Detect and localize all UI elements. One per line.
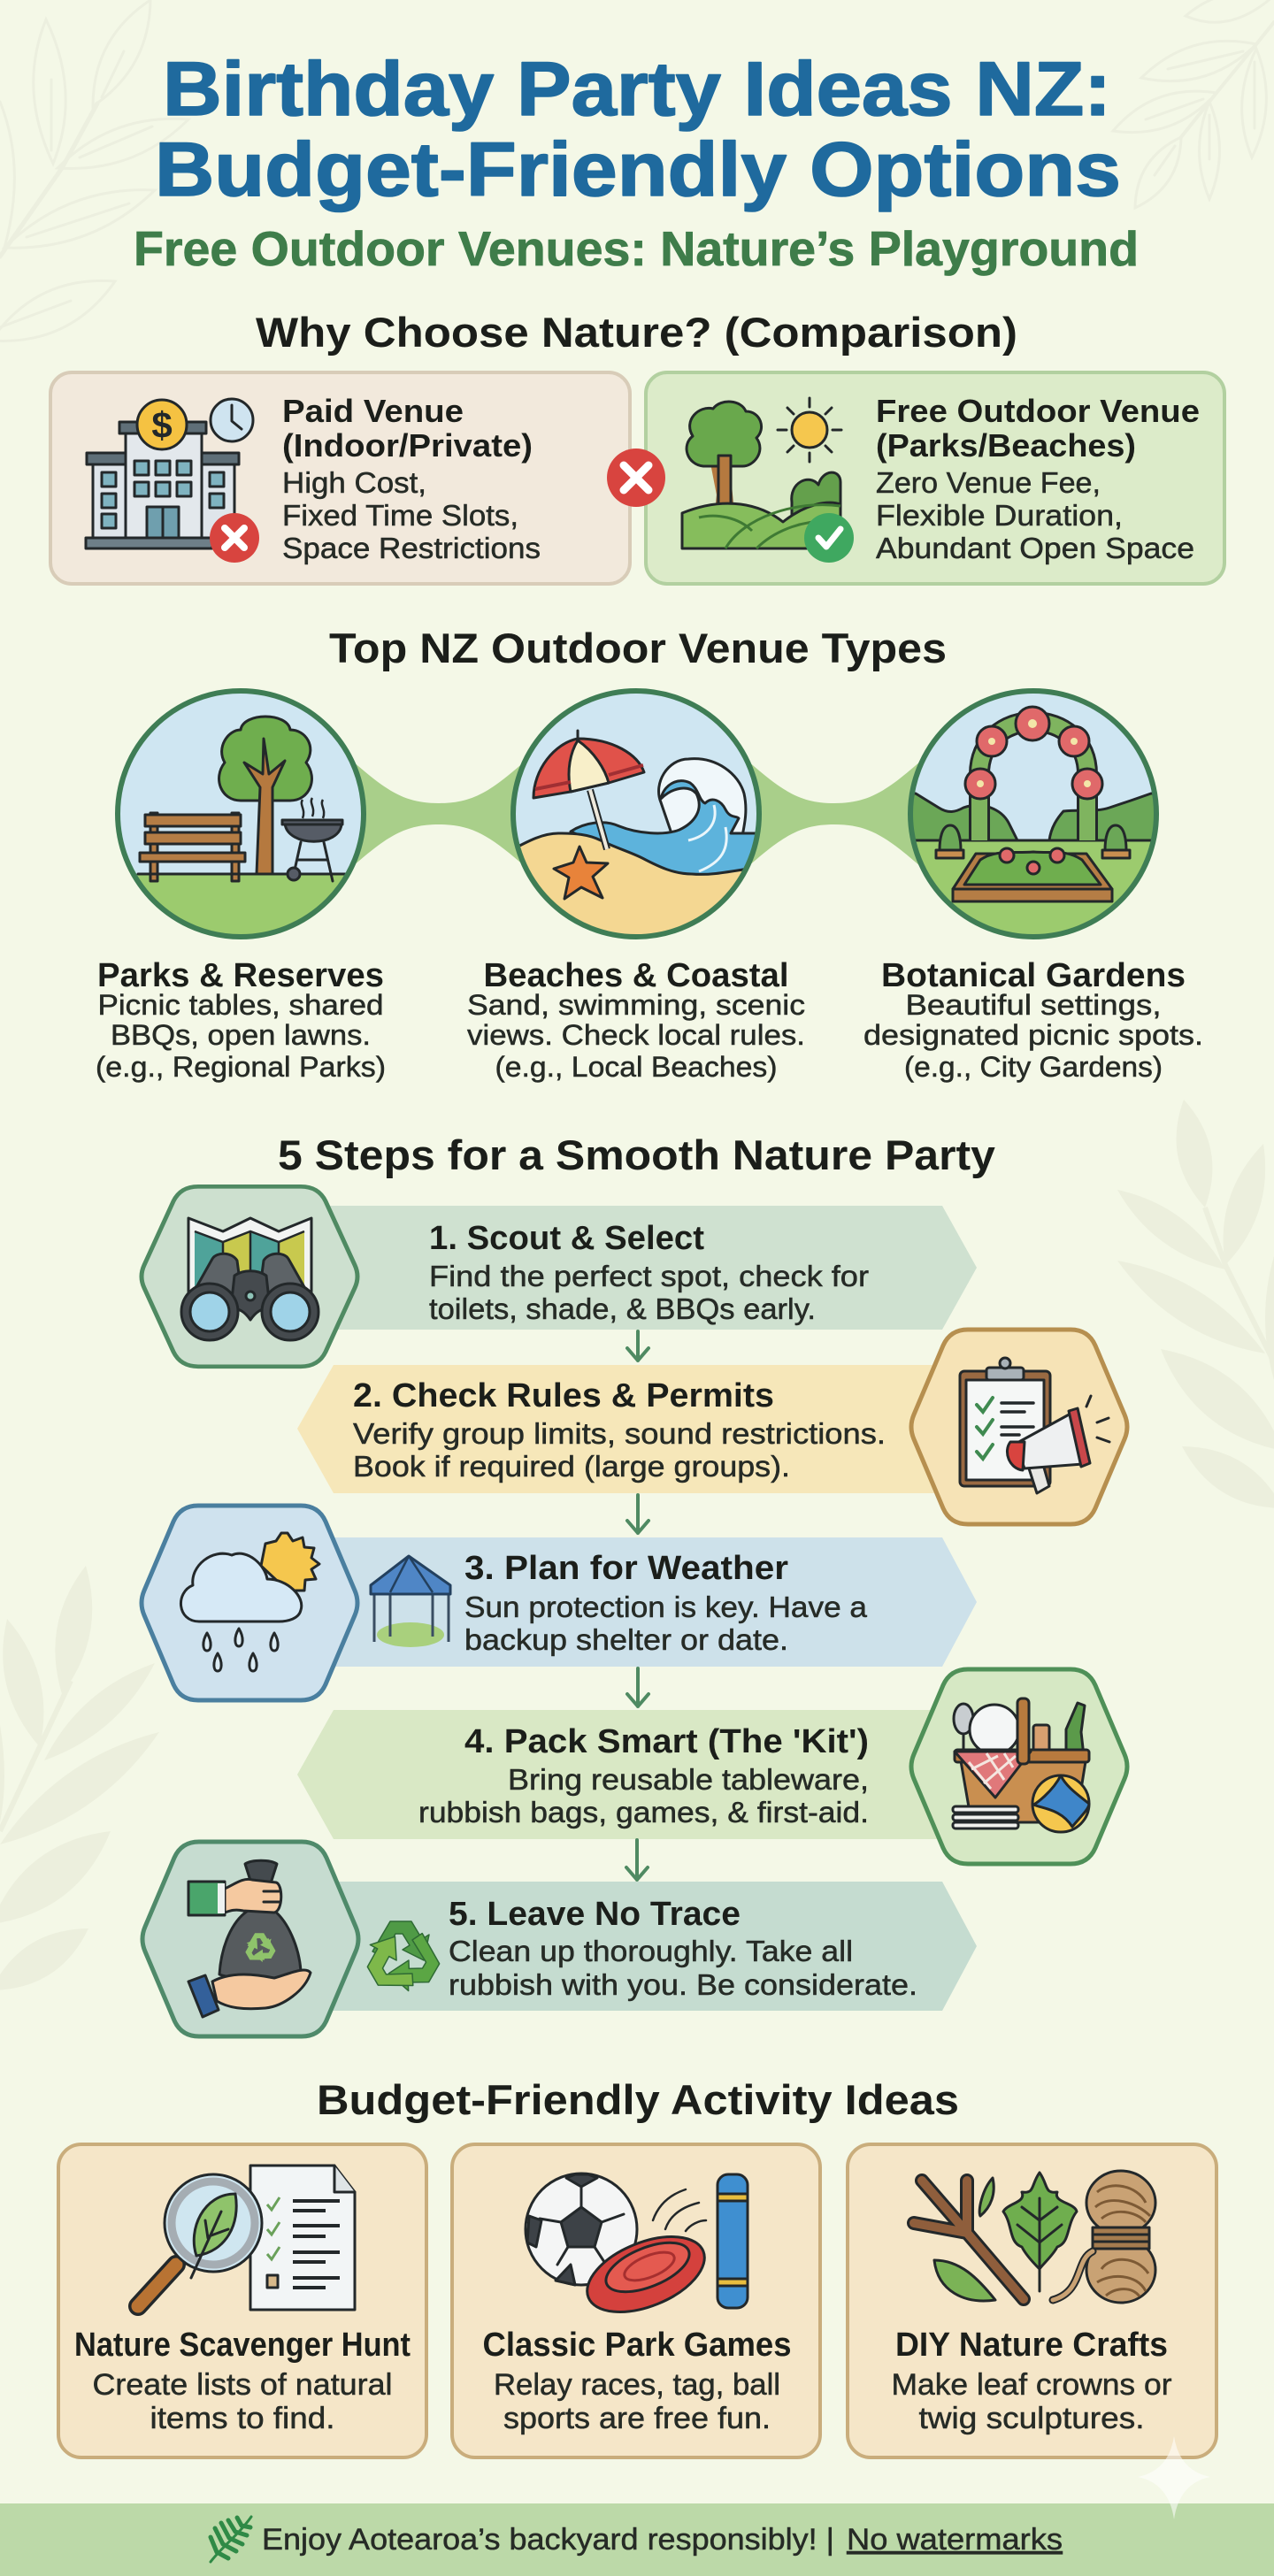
step 3 text <box>464 1550 868 1656</box>
sparkle mark <box>1138 2436 1210 2519</box>
arrow: step 1 to 2 <box>627 1331 649 1361</box>
venue text: botanical gardens <box>863 957 1203 1083</box>
footer text: Enjoy Aotearoa’s backyard responsibly! | <box>262 2523 834 2557</box>
footer bar <box>0 2503 1274 2576</box>
scavenger hunt text: items to find. <box>150 2402 334 2435</box>
card: park games <box>452 2144 820 2457</box>
venue text: beaches: Beaches & Coastal <box>483 957 789 994</box>
free outdoor venue text: Zero Venue Fee, <box>876 466 1101 499</box>
icon: paid venue building <box>86 399 259 563</box>
venue text: beaches: views. Check local rules. <box>467 1019 805 1051</box>
park games text: sports are free fun. <box>503 2402 771 2435</box>
step 1 text: 1. Scout & Select <box>429 1220 704 1257</box>
title: Budget-Friendly Options <box>155 127 1121 212</box>
free outdoor venue text: Abundant Open Space <box>876 532 1194 564</box>
step 3 text: Sun protection is key. Have a <box>464 1591 868 1623</box>
step 2 text: 2. Check Rules & Permits <box>353 1377 774 1414</box>
icon: beach circle <box>504 691 770 947</box>
icon: recycle symbol <box>358 1921 449 2000</box>
step 3: plan for weather <box>142 1506 977 1700</box>
venue text: parks: BBQs, open lawns. <box>111 1019 371 1051</box>
icon: map and binoculars <box>181 1218 318 1340</box>
background leaves: top left <box>0 0 188 341</box>
paid venue text: (Indoor/Private) <box>282 427 533 464</box>
step 2 text: Book if required (large groups). <box>353 1450 790 1483</box>
park games text: Relay races, tag, ball <box>494 2368 780 2402</box>
step 5 text: Clean up thoroughly. Take all <box>449 1935 853 1967</box>
step 3 text: backup shelter or date. <box>464 1623 788 1656</box>
step 5: leave no trace <box>142 1842 977 2036</box>
paid venue text: Fixed Time Slots, <box>282 499 518 532</box>
heading: activity ideas: Budget-Friendly Activity Ideas <box>317 2076 959 2123</box>
step 4 text: Bring reusable tableware, <box>508 1763 869 1796</box>
icon: sun, cloud and rain <box>180 1533 319 1671</box>
step 5 text: 5. Leave No Trace <box>449 1896 741 1933</box>
icon: twig, leaves and yarn <box>914 2171 1155 2303</box>
title: Birthday Party Ideas NZ: <box>163 47 1111 132</box>
step 1 text: Find the perfect spot, check for <box>429 1260 869 1292</box>
icon: parks circle <box>115 688 366 939</box>
card: nature crafts <box>848 2144 1216 2457</box>
icon: fern <box>211 2517 251 2562</box>
nature crafts text: twig sculptures. <box>918 2402 1145 2435</box>
background leaves: left middle <box>0 1566 159 1990</box>
heading: venue types: Top NZ Outdoor Venue Types <box>329 625 947 671</box>
step 4 text <box>418 1723 869 1828</box>
free outdoor venue text: Free Outdoor Venue <box>876 393 1200 429</box>
connector between venue circles <box>352 761 921 867</box>
park games text: Classic Park Games <box>483 2327 791 2364</box>
nature crafts text <box>892 2327 1171 2435</box>
step 3 text: 3. Plan for Weather <box>464 1550 788 1587</box>
arrow: step 3 to 4 <box>627 1668 649 1706</box>
paid venue text: High Cost, <box>282 466 426 499</box>
heading: why choose nature: Why Choose Nature? (Comparison) <box>256 309 1017 356</box>
background leaves: top right <box>1113 0 1274 208</box>
icon: ball, frisbee and baton <box>526 2174 748 2327</box>
footer text: No watermarks <box>847 2523 1063 2557</box>
venue text: botanical gardens: Beautiful settings, <box>906 989 1161 1021</box>
panel: free outdoor venue <box>646 372 1224 584</box>
icon: shelter tent <box>371 1556 450 1647</box>
venue text: beaches <box>467 957 805 1083</box>
nature crafts text: DIY Nature Crafts <box>895 2327 1168 2364</box>
step 4 text: rubbish bags, games, & first-aid. <box>418 1796 869 1828</box>
venue text: botanical gardens: Botanical Gardens <box>881 957 1186 994</box>
subtitle: Free Outdoor Venues: Nature’s Playground <box>134 221 1139 276</box>
scavenger hunt text: Create lists of natural <box>92 2368 393 2402</box>
venue text: beaches: Sand, swimming, scenic <box>467 989 805 1021</box>
paid venue text: Paid Venue <box>282 393 464 429</box>
icon: clipboard and megaphone <box>960 1358 1109 1493</box>
step 1: scout and select <box>142 1186 977 1367</box>
scavenger hunt text: Nature Scavenger Hunt <box>74 2327 411 2364</box>
step 2 text: Verify group limits, sound restrictions. <box>353 1417 886 1450</box>
icon: rubbish bag in hands <box>188 1860 311 2017</box>
step 1 text <box>429 1220 869 1325</box>
scavenger hunt text <box>74 2327 411 2435</box>
venue text: botanical gardens: (e.g., City Gardens) <box>904 1051 1163 1083</box>
icon: paid venue building: $ <box>151 404 173 446</box>
venue text: parks: Picnic tables, shared <box>97 989 384 1021</box>
icon: picnic basket <box>953 1698 1089 1832</box>
title <box>155 47 1121 212</box>
background leaves: right middle <box>1117 1100 1274 1508</box>
venue text: parks <box>96 957 386 1083</box>
icon: free outdoor landscape <box>682 398 854 563</box>
icon: botanical garden circle <box>902 691 1168 951</box>
footer text <box>262 2523 1063 2557</box>
paid venue text <box>282 393 541 564</box>
venue text: parks: (e.g., Regional Parks) <box>96 1051 386 1083</box>
step 2: check rules <box>297 1330 1127 1524</box>
free outdoor venue text <box>876 393 1200 564</box>
free outdoor venue text: (Parks/Beaches) <box>876 427 1136 464</box>
step 2 text <box>353 1377 886 1483</box>
arrow: step 2 to 3 <box>627 1495 649 1533</box>
panel: paid venue <box>50 372 630 584</box>
park games text <box>483 2327 791 2435</box>
venue text: beaches: (e.g., Local Beaches) <box>495 1051 777 1083</box>
card: scavenger hunt <box>58 2144 426 2457</box>
arrow: step 4 to 5 <box>626 1840 648 1880</box>
venue text: parks: Parks & Reserves <box>97 957 384 994</box>
heading: five steps: 5 Steps for a Smooth Nature Party <box>278 1131 995 1178</box>
icon: magnifier and checklist <box>138 2166 355 2310</box>
step 1 text: toilets, shade, & BBQs early. <box>429 1292 816 1325</box>
step 4 text: 4. Pack Smart (The 'Kit') <box>464 1723 869 1760</box>
venue text: botanical gardens: designated picnic spots. <box>863 1019 1203 1051</box>
free outdoor venue text: Flexible Duration, <box>876 499 1123 532</box>
step 4: pack smart <box>297 1669 1127 1864</box>
step 5 text: rubbish with you. Be considerate. <box>449 1968 917 2001</box>
icon: cross badge between panels <box>607 448 665 507</box>
paid venue text: Space Restrictions <box>282 532 541 564</box>
nature crafts text: Make leaf crowns or <box>892 2368 1171 2402</box>
step 5 text <box>449 1896 917 2001</box>
